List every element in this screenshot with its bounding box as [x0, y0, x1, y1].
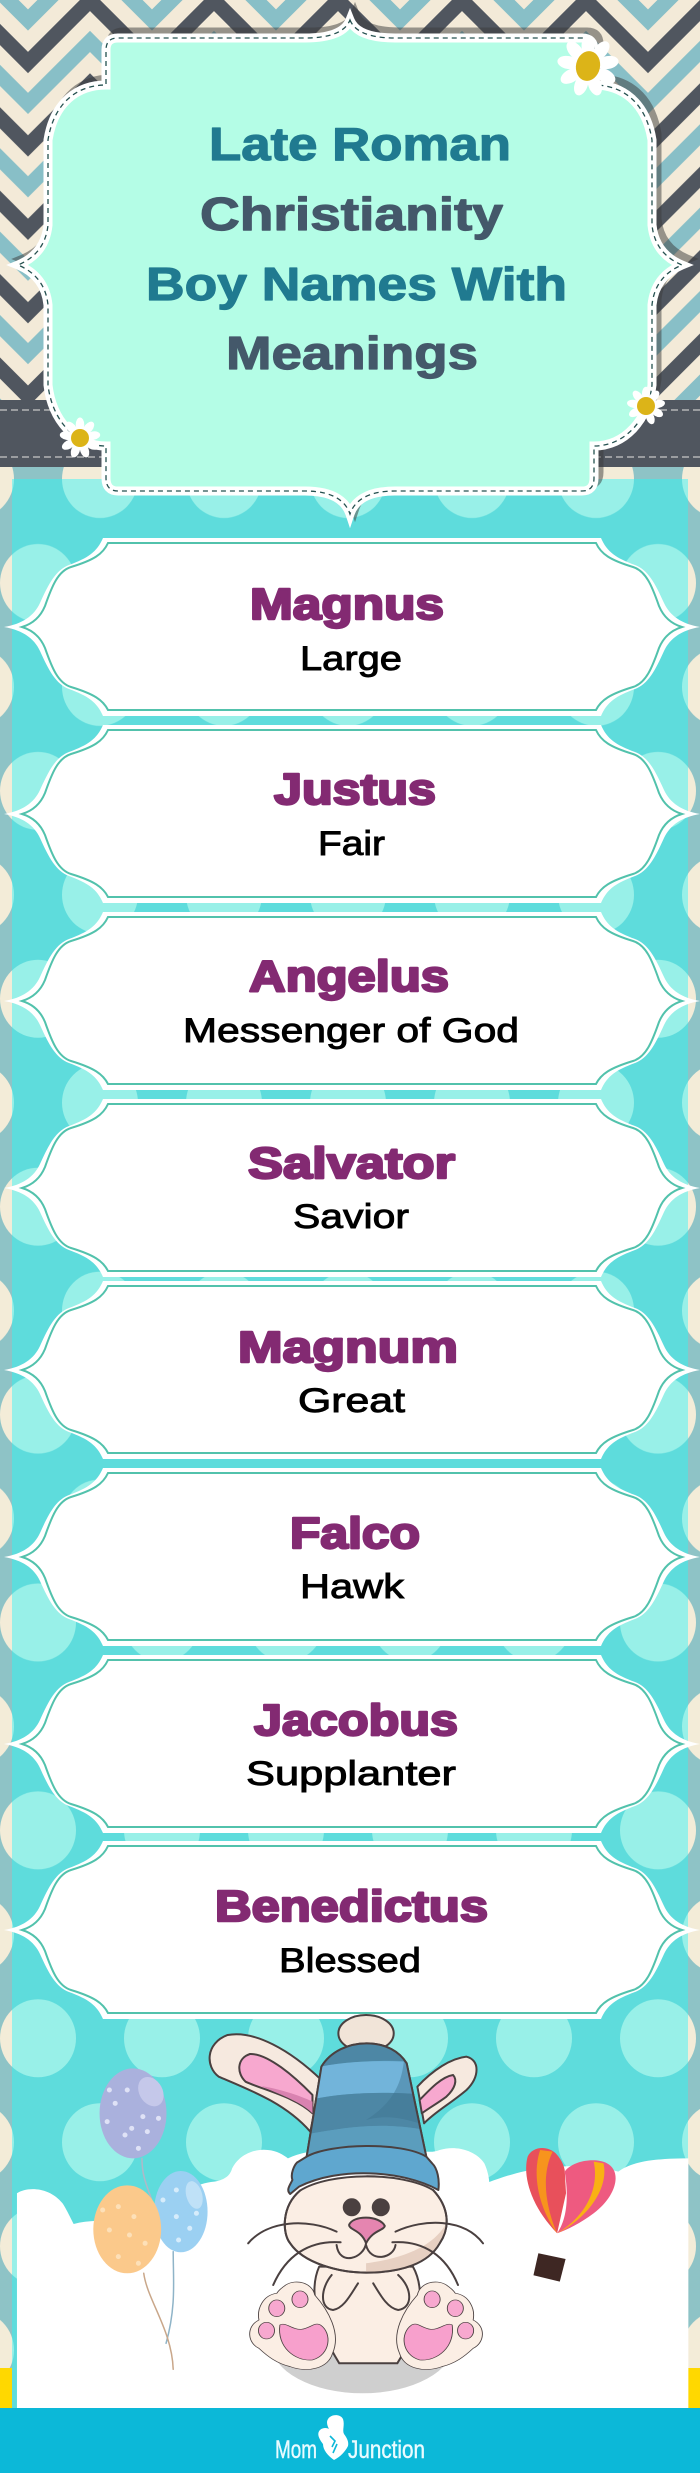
card: Jacobus — [4, 1655, 700, 1833]
illustration: cloud, balloons and bunny — [17, 2015, 688, 2408]
card: Benedictus: Blessed — [279, 1942, 421, 1980]
card: Justus — [4, 725, 700, 903]
logo wordmark: Junction — [348, 2436, 425, 2464]
bunny — [210, 2015, 483, 2393]
card: Benedictus: Benedictus — [215, 1882, 488, 1931]
footer bar — [0, 2408, 700, 2473]
card: Angelus: Angelus — [249, 952, 449, 1001]
title: Late Roman — [209, 118, 511, 170]
icon: small daisy right — [626, 387, 666, 425]
logo wordmark: Mom — [275, 2436, 317, 2464]
icon: balloon basket — [533, 2253, 566, 2282]
panel: title plaque — [18, 14, 687, 514]
dark stitched band — [0, 400, 700, 467]
card: Salvator — [4, 1099, 700, 1277]
card: Magnum: Magnum — [238, 1323, 458, 1372]
card: Magnus: Magnus — [250, 580, 444, 629]
icon: small daisy left — [59, 418, 101, 459]
balloon: blue — [154, 2171, 208, 2343]
icon: logo mark — [318, 2415, 348, 2460]
title: Christianity — [200, 188, 503, 240]
logo wordmark — [275, 2436, 425, 2464]
card: Magnum: Great — [298, 1382, 406, 1420]
shadow — [278, 2354, 444, 2394]
body — [314, 2267, 420, 2363]
card: Magnum — [4, 1281, 700, 1459]
foot right — [397, 2282, 482, 2370]
hat brim — [288, 2146, 439, 2194]
whiskers — [248, 2223, 483, 2285]
ear right — [417, 2057, 477, 2123]
card: Justus: Fair — [318, 825, 385, 863]
title — [146, 118, 567, 379]
foot left — [250, 2282, 335, 2370]
card: Falco: Hawk — [300, 1568, 405, 1606]
card: Falco: Falco — [290, 1509, 420, 1558]
card: Magnus — [4, 538, 700, 716]
pompom — [338, 2015, 394, 2052]
card: Salvator: Savior — [293, 1198, 409, 1236]
cloud — [17, 2148, 688, 2408]
title: Boy Names With — [146, 258, 567, 310]
card: Jacobus: Supplanter — [246, 1755, 456, 1793]
card: Falco — [4, 1468, 700, 1646]
balloon: orange — [93, 2185, 173, 2369]
head — [285, 2176, 447, 2273]
icon: heart balloon — [526, 2148, 616, 2233]
card: Salvator: Salvator — [248, 1139, 455, 1188]
balloon: purple — [100, 2068, 168, 2200]
card: Angelus: Messenger of God — [183, 1012, 519, 1050]
card: Jacobus: Jacobus — [254, 1696, 458, 1745]
title: Meanings — [226, 327, 478, 379]
card: Benedictus — [4, 1841, 700, 2019]
ear left — [210, 2034, 321, 2132]
card: Justus: Justus — [274, 765, 436, 814]
icon: large daisy — [556, 35, 620, 97]
chevron header background — [0, 0, 700, 401]
hat — [307, 2043, 426, 2157]
card: Angelus — [4, 912, 700, 1090]
card: Magnus: Large — [300, 640, 402, 678]
